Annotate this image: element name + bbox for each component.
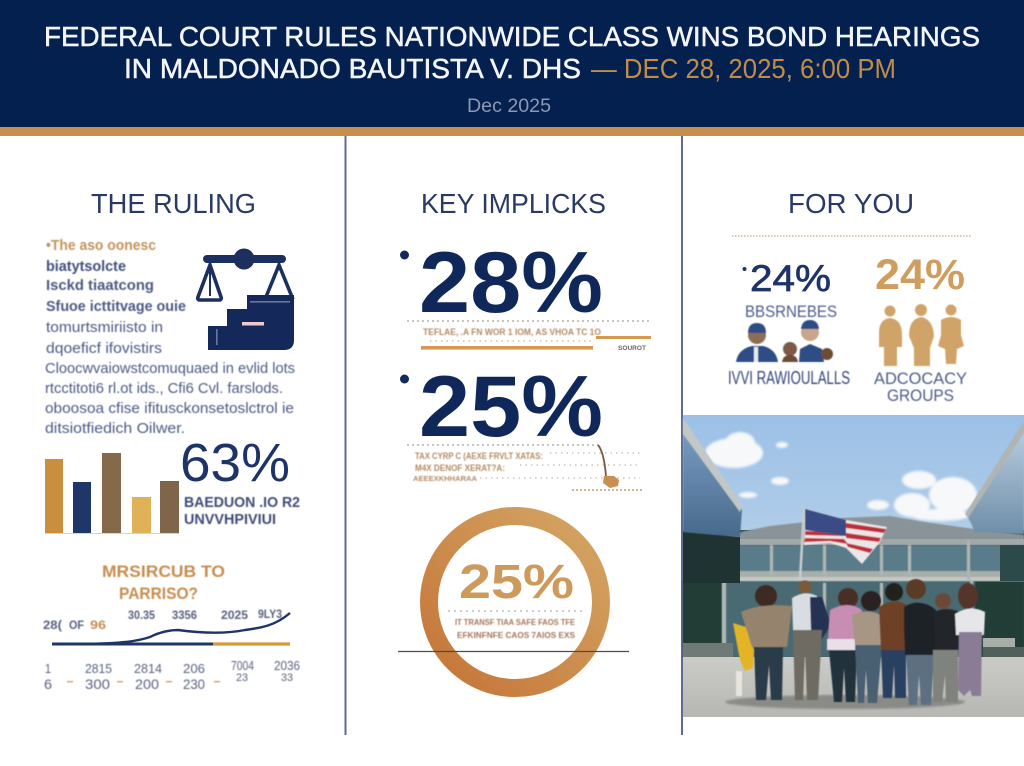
heading: the ruling: THE RULING [91, 188, 256, 219]
heading: line chart [102, 562, 225, 603]
bar chart [45, 453, 179, 534]
text block: ruling summary: Isckd tiaatcong [46, 278, 154, 294]
stat: 25%: M4X DENOF XERAT?A: [415, 463, 505, 474]
axis labels: 7004 [231, 659, 254, 673]
icon: scales of justice with steps [198, 248, 294, 350]
flag [800, 508, 887, 580]
stat: 25%: TAX CYRP C (AEXE FRVLT XATAS: [415, 451, 543, 462]
stat: 28%: TEFLAE, .A FN WOR 1 IOM, AS VHOA TC 1O [423, 327, 601, 338]
stat: individuals: IVVI RAWIOULALLS [728, 367, 850, 388]
stat: 28%: 28% [419, 235, 603, 331]
left glass wing [683, 418, 742, 537]
stat: 63% [180, 433, 300, 528]
line chart: OF [69, 620, 84, 632]
axis labels: 1 [45, 662, 51, 676]
stat: advocacy groups: ADCOCACY [874, 369, 967, 388]
title: IN MALDONADO BAUTISTA V. DHS [124, 53, 581, 84]
panel: key implications [398, 188, 652, 688]
stat: ring 25%: 25% [459, 556, 574, 609]
stat: advocacy groups [874, 251, 967, 405]
heading: for you: FOR YOU [788, 188, 914, 219]
line chart: 3356 [172, 610, 197, 622]
axis labels: 33 [281, 672, 293, 684]
title: FEDERAL COURT RULES NATIONWIDE CLASS WINS BOND HEARINGS [44, 21, 980, 52]
text block: ruling summary: tomurtsmiriisto in [46, 320, 163, 336]
text block: ruling summary: Sfuoe icttitvage ouie [46, 299, 186, 315]
text block: ruling summary: rtcctitoti6 rl.ot ids., Cfi6 Cvl. farslods. [45, 381, 283, 397]
line chart: 9LY3 [258, 609, 282, 621]
building [683, 516, 1024, 660]
text block: ruling summary: biatytsolcte [46, 259, 126, 275]
stat: 28% [400, 235, 652, 352]
column dividers [344, 136, 683, 735]
stat: 63%: 63% [180, 433, 290, 493]
text block: ruling summary: •The aso oonesc [46, 238, 156, 254]
stat: ring 25% [398, 516, 629, 688]
axis labels: 2036 [274, 659, 300, 673]
text block: ruling summary: oboosoa cfise ifitusckonsetoslctrol ie [45, 401, 294, 417]
panel: the ruling [43, 188, 300, 692]
photo: crowd with flag at courthouse [683, 415, 1024, 717]
heading: line chart: PARRISO? [119, 584, 198, 603]
axis labels: 206 [183, 662, 205, 676]
line chart: 2025 [221, 610, 249, 622]
text block: ruling summary: Cloocwvaiowstcomuquaed in evlid lots [45, 361, 295, 377]
stat: ring 25%: IT TRANSF TIAA SAFE FAOS TFE [455, 617, 575, 627]
line chart: 28( [43, 620, 62, 632]
line chart [43, 609, 300, 692]
stat: advocacy groups: 24% [875, 251, 965, 299]
axis labels: 2815 [85, 662, 112, 676]
title: — DEC 28, 2025, 6:00 PM [591, 53, 896, 84]
axis labels: 2814 [134, 662, 162, 676]
axis labels: 200 [135, 676, 159, 692]
header banner [0, 0, 1024, 136]
icon: three standing figures [879, 304, 964, 366]
heading: key implicks: KEY IMPLICKS [421, 188, 606, 219]
heading: line chart: MRSIRCUB TO [102, 562, 225, 581]
text block: ruling summary: dqoeficf ifovistirs [46, 341, 162, 357]
stat: advocacy groups: GROUPS [887, 386, 954, 405]
line chart: 30.35 [128, 610, 156, 622]
stat: 63%: BAEDUON .IO R2 [184, 494, 300, 511]
stat: 25% [400, 359, 643, 490]
text block: ruling summary: ditsiotfiedich Oilwer. [45, 421, 185, 437]
title [44, 21, 980, 84]
line chart: 96 [90, 620, 106, 632]
stat: individuals: 24% [750, 258, 831, 299]
stat: individuals [728, 258, 850, 388]
ground [683, 657, 1024, 717]
crowd [733, 579, 985, 705]
text block: ruling summary [45, 238, 295, 437]
stat: 63%: UNVVHPIVIUI [184, 511, 276, 528]
date: Dec 2025 [467, 96, 551, 117]
panel: for you [683, 188, 1024, 717]
axis labels: 230 [183, 676, 205, 692]
stat: individuals: BBSRNEBES [745, 302, 837, 321]
stat: 25%: AEEEXKHHARAA [413, 476, 477, 483]
clouds [705, 432, 977, 521]
axis labels: 6 [44, 676, 52, 692]
right glass wing [965, 421, 1024, 534]
stat: 28%: SOUROT [618, 345, 646, 352]
stat: 25%: 25% [419, 359, 603, 455]
icon: people group [736, 320, 833, 362]
stat: ring 25%: EFKINFNFE CAOS 7AIOS EXS [457, 630, 575, 640]
axis labels: 300 [85, 676, 110, 692]
axis labels [44, 659, 300, 692]
axis labels: 23 [236, 672, 248, 684]
